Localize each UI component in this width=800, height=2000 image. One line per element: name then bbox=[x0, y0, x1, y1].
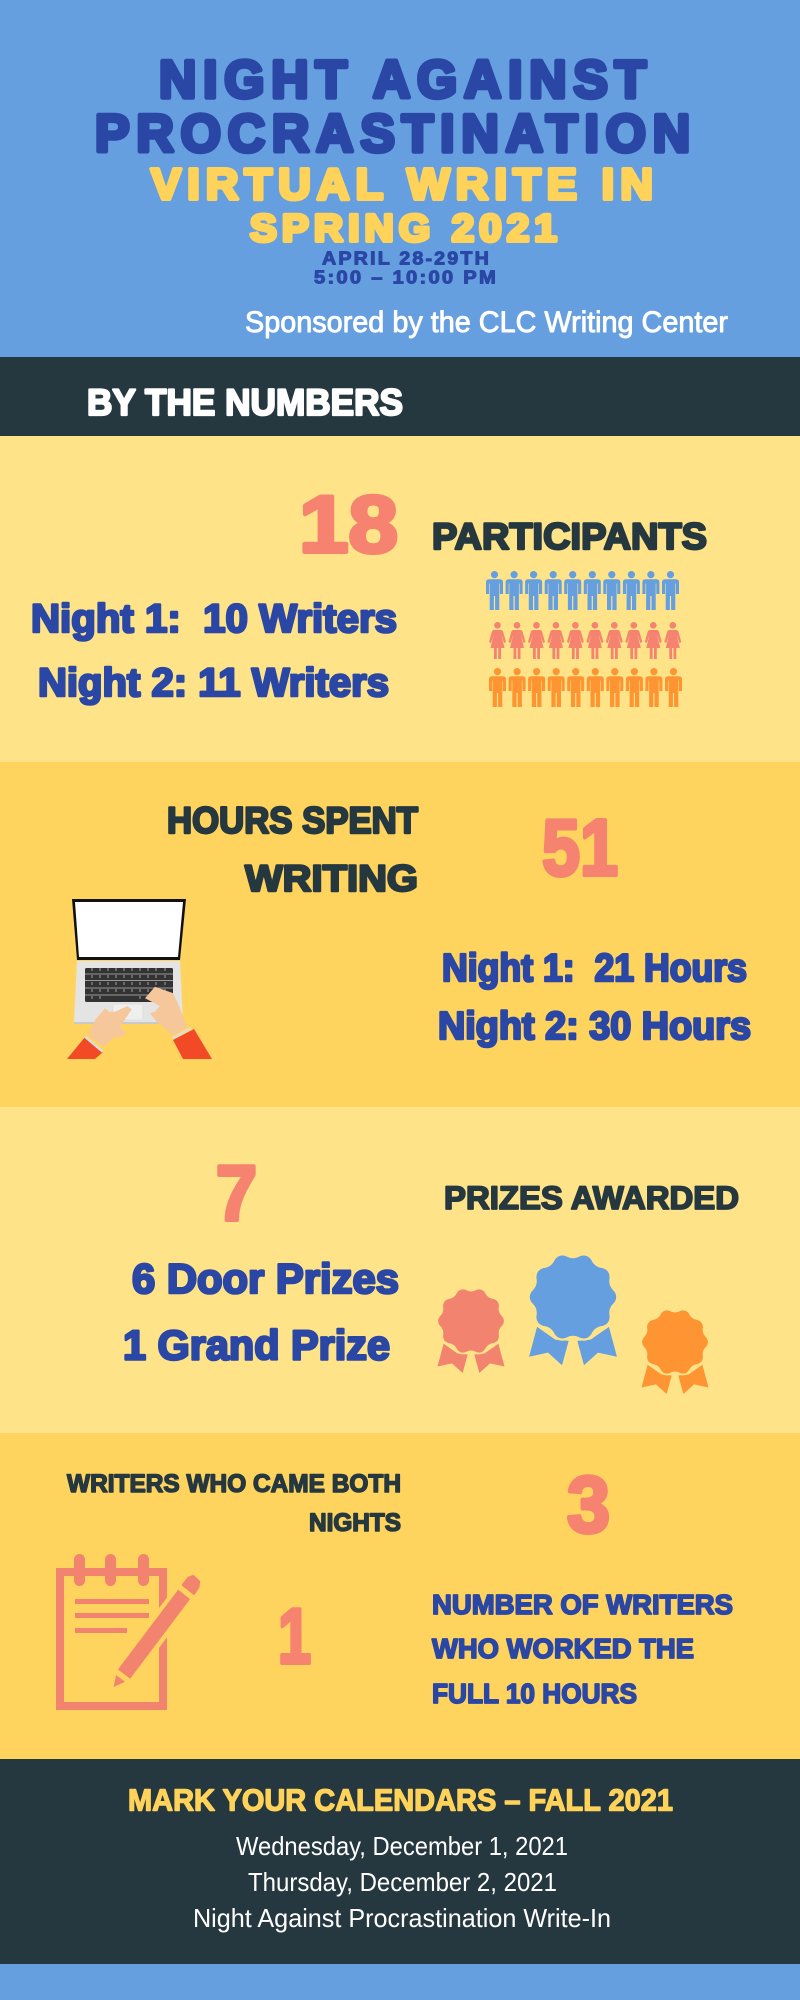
panel: writers who came both nights bbox=[0, 1433, 800, 1759]
text: full 10 hours: FULL 10 HOURS bbox=[432, 1678, 637, 1709]
panel: mark your calendars bbox=[0, 1759, 800, 1964]
heading: writers who came both: WRITERS WHO CAME BOTH bbox=[67, 1470, 401, 1498]
sponsor line: Sponsored by the CLC Writing Center bbox=[245, 306, 728, 339]
text: date one: Wednesday, December 1, 2021 bbox=[236, 1831, 568, 1861]
subtitle: Spring 2021: SPRING 2021 bbox=[250, 208, 562, 250]
icon: notepad and pencil bbox=[60, 1554, 199, 1706]
text: night 1 writers: Night 1: 10 Writers bbox=[31, 597, 397, 641]
icon row: blue men bbox=[486, 571, 679, 610]
number: 3: 3 bbox=[567, 1460, 610, 1549]
text: date two: Thursday, December 2, 2021 bbox=[248, 1867, 557, 1897]
text: night 2 hours: Night 2: 30 Hours bbox=[438, 1005, 751, 1048]
icon row: orange men bbox=[489, 668, 682, 707]
number: 51: 51 bbox=[542, 803, 618, 892]
number: 18: 18 bbox=[299, 480, 398, 570]
background: header panel bbox=[0, 0, 800, 357]
heading: mark your calendars: MARK YOUR CALENDARS – FALL 2021 bbox=[128, 1782, 673, 1817]
footer band bbox=[0, 1964, 800, 2000]
heading: nights: NIGHTS bbox=[309, 1509, 401, 1537]
icon: coral ribbon bbox=[437, 1289, 505, 1373]
text: door prizes: 6 Door Prizes bbox=[132, 1255, 399, 1302]
icon: blue ribbon bbox=[529, 1254, 617, 1365]
panel: prizes awarded bbox=[0, 1107, 800, 1433]
panel: hours spent writing bbox=[0, 762, 800, 1107]
panel: participants bbox=[0, 436, 800, 762]
text: night 1 hours: Night 1: 21 Hours bbox=[442, 947, 747, 990]
icon: orange ribbon bbox=[641, 1310, 709, 1394]
heading: writing: WRITING bbox=[245, 858, 418, 899]
subtitle: Virtual Write In: VIRTUAL WRITE IN bbox=[151, 160, 659, 209]
heading: hours spent: HOURS SPENT bbox=[167, 800, 418, 841]
date line: APRIL 28-29TH bbox=[322, 248, 491, 268]
text: who worked the: WHO WORKED THE bbox=[432, 1633, 694, 1664]
title: Procrastination: PROCRASTINATION bbox=[95, 105, 697, 164]
panel: by the numbers band bbox=[0, 357, 800, 436]
number: 1: 1 bbox=[278, 1592, 311, 1680]
text: night 2 writers: Night 2: 11 Writers bbox=[38, 661, 389, 705]
heading: by the numbers: BY THE NUMBERS bbox=[87, 382, 403, 423]
number: 7: 7 bbox=[216, 1149, 257, 1237]
time line: 5:00 – 10:00 PM bbox=[314, 267, 498, 287]
label: prizes awarded: PRIZES AWARDED bbox=[444, 1180, 739, 1216]
text: number of writers: NUMBER OF WRITERS bbox=[432, 1589, 733, 1620]
icon: laptop with hands bbox=[67, 899, 212, 1059]
label: participants: PARTICIPANTS bbox=[432, 516, 707, 557]
icon row: coral women bbox=[489, 622, 681, 659]
title: Night Against: NIGHT AGAINST bbox=[159, 51, 653, 110]
text: grand prize: 1 Grand Prize bbox=[123, 1322, 390, 1368]
text: event name: Night Against Procrastination Write-In bbox=[193, 1903, 611, 1933]
